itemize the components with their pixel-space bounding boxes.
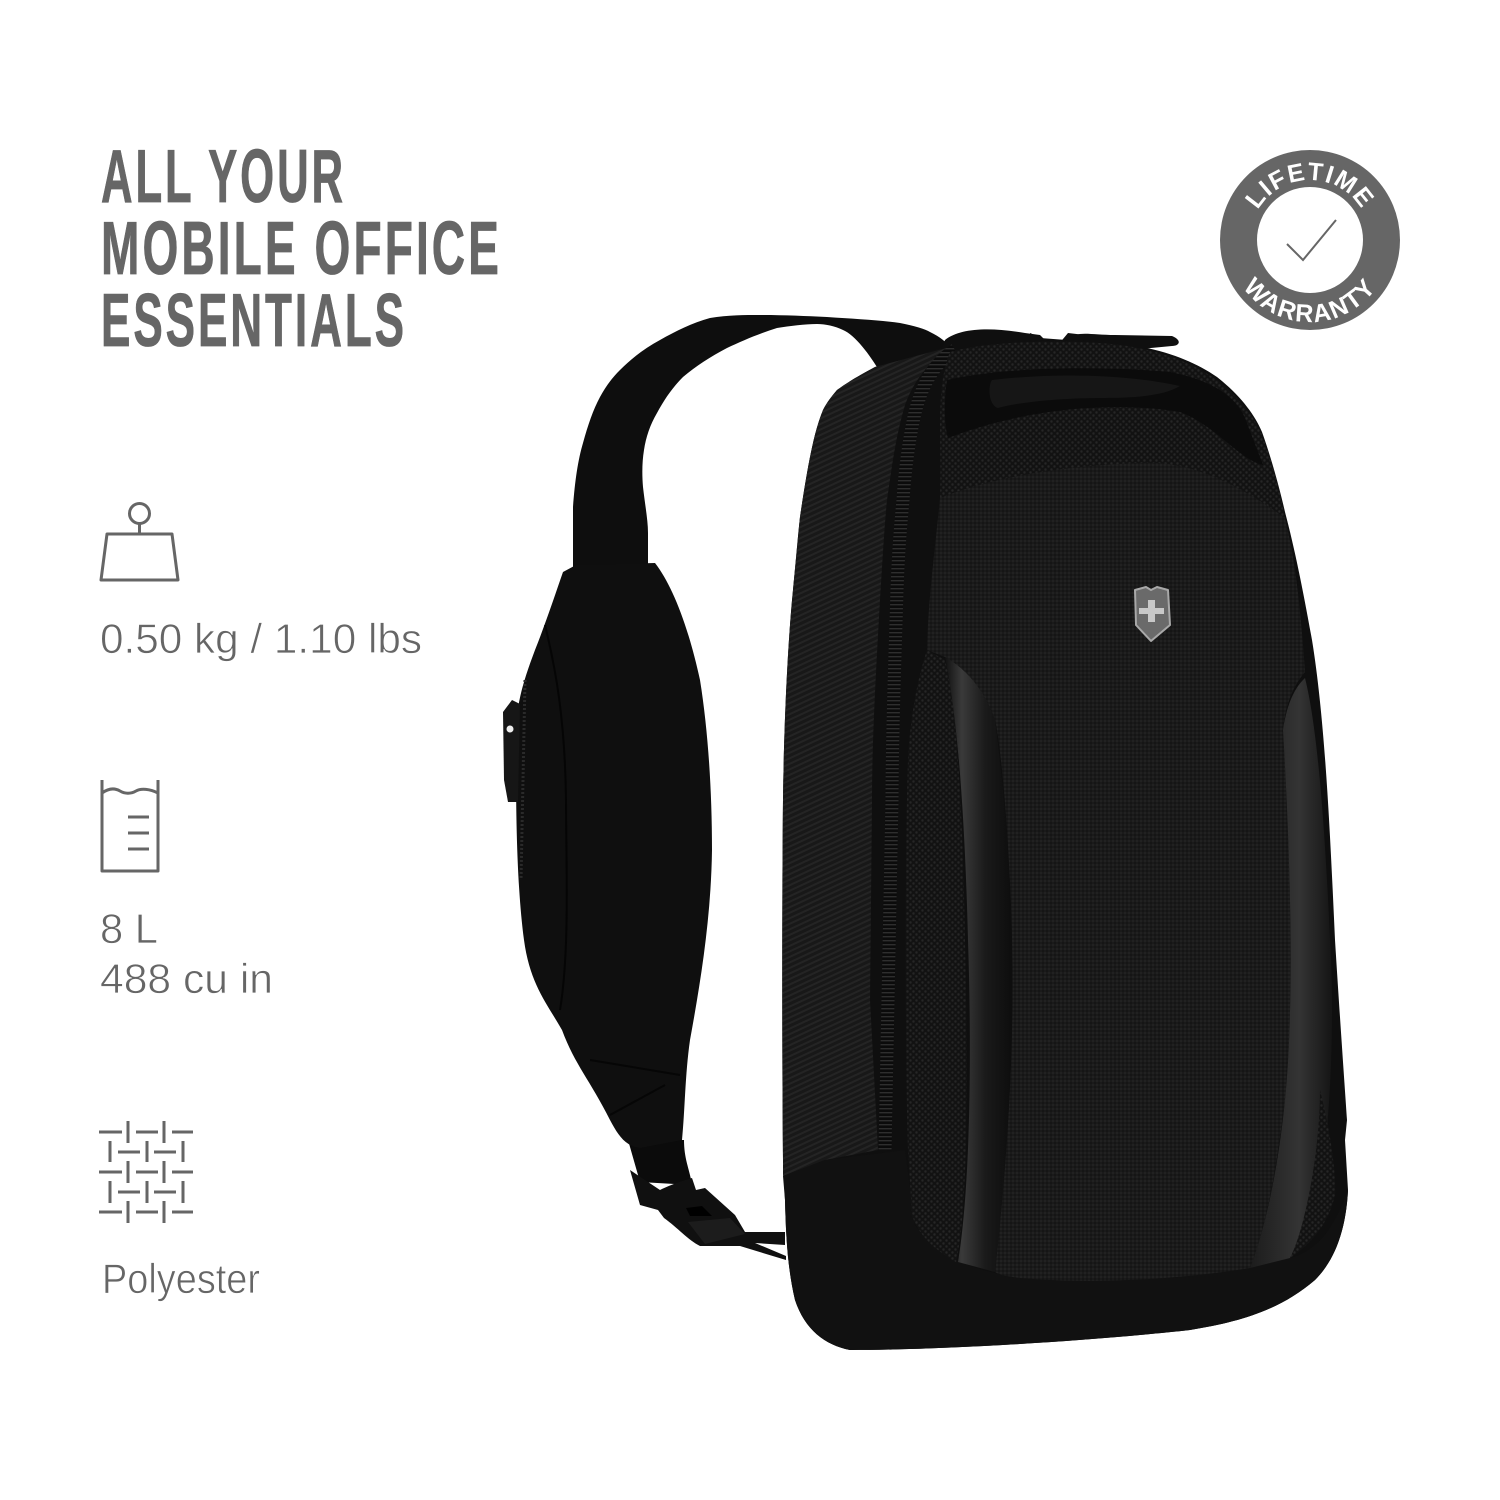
- front fabric panel: [927, 463, 1305, 1281]
- title: MOBILE OFFICE: [101, 206, 502, 290]
- title: ALL YOUR: [101, 134, 346, 218]
- lifetime warranty badge: LIFETIME: [1244, 162, 1374, 208]
- volume text: 8 L: [100, 905, 158, 952]
- lower strap and buckle: [628, 1140, 786, 1260]
- main zipper: [885, 350, 955, 1150]
- volume text: 488 cu in: [100, 955, 273, 1002]
- base panel: [783, 1150, 1348, 1350]
- title: ESSENTIALS: [101, 278, 407, 362]
- side mesh pocket: [906, 650, 967, 1262]
- volume text: [100, 905, 273, 1002]
- side gusset twill panel: [782, 347, 950, 1176]
- carry handle: [945, 368, 1263, 465]
- material text: Polyester: [102, 1255, 260, 1302]
- zipper grips: [940, 329, 1179, 352]
- weight text: 0.50 kg / 1.10 lbs: [100, 615, 422, 662]
- brand shield logo: [1135, 587, 1170, 641]
- right mesh: [1290, 1090, 1335, 1258]
- lifetime warranty badge: [1220, 150, 1400, 330]
- title: [101, 134, 502, 362]
- icon: weight: [101, 504, 178, 580]
- strap pad: [503, 563, 712, 1148]
- backpack product illustration: [503, 315, 1348, 1350]
- shoulder strap arch: [573, 315, 952, 575]
- leather trim right: [1250, 678, 1332, 1268]
- icon: woven material: [99, 1121, 193, 1223]
- main body: [782, 338, 1348, 1350]
- leather trim left: [945, 657, 1012, 1272]
- top yoke ballistic panel: [940, 342, 1285, 518]
- lifetime warranty badge: WARRANTY: [1246, 276, 1372, 322]
- icon: volume beaker: [102, 780, 158, 871]
